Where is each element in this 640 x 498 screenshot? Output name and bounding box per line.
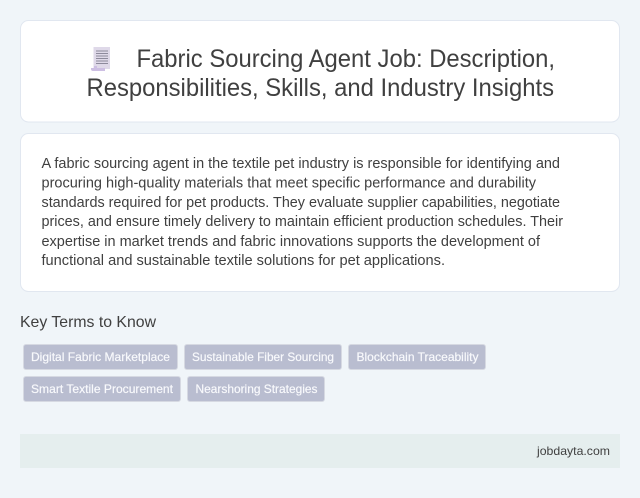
tag: blockchain traceability: Blockchain Traceability — [356, 350, 478, 364]
heading: title — [86, 45, 555, 102]
footer — [20, 434, 620, 468]
text block: description: standards required for pet products. They evaluate supplier capabilities, negotiate — [42, 195, 560, 211]
heading: title: Fabric Sourcing Agent Job: Description, — [136, 45, 555, 73]
tag: smart textile procurement: Smart Textile Procurement — [31, 382, 174, 396]
panel: title card — [20, 20, 620, 122]
text block: description: prices, and ensure timely delivery to maintain efficient production schedules. Their — [42, 214, 563, 230]
footer: jobdayta.com — [536, 444, 610, 458]
text block: description — [42, 156, 563, 269]
tag: nearshoring strategies — [188, 376, 324, 402]
tag: digital fabric marketplace: Digital Fabric Marketplace — [31, 350, 170, 364]
tag: smart textile procurement — [24, 376, 180, 402]
tag: digital fabric marketplace — [24, 344, 178, 370]
tag: sustainable fiber sourcing — [184, 344, 342, 370]
heading: key terms: Key Terms to Know — [20, 314, 156, 331]
text block: description: functional and sustainable textile solutions for pet applications. — [42, 253, 445, 269]
text block: description: A fabric sourcing agent in the textile pet industry is responsible for identifying and — [42, 156, 560, 172]
panel: description — [20, 134, 620, 292]
icon: paper scroll — [91, 47, 110, 71]
text block: description: procuring high-quality materials that meet specific performance and durability — [42, 176, 537, 192]
tag: nearshoring strategies: Nearshoring Strategies — [196, 382, 318, 396]
text block: description: expertise in market trends and fabric innovations supports the development of — [42, 234, 541, 250]
tag: blockchain traceability — [348, 344, 486, 370]
tags: key terms — [24, 344, 486, 402]
heading: title: Responsibilities, Skills, and Industry Insights — [86, 74, 554, 102]
tag: sustainable fiber sourcing: Sustainable Fiber Sourcing — [192, 350, 334, 364]
